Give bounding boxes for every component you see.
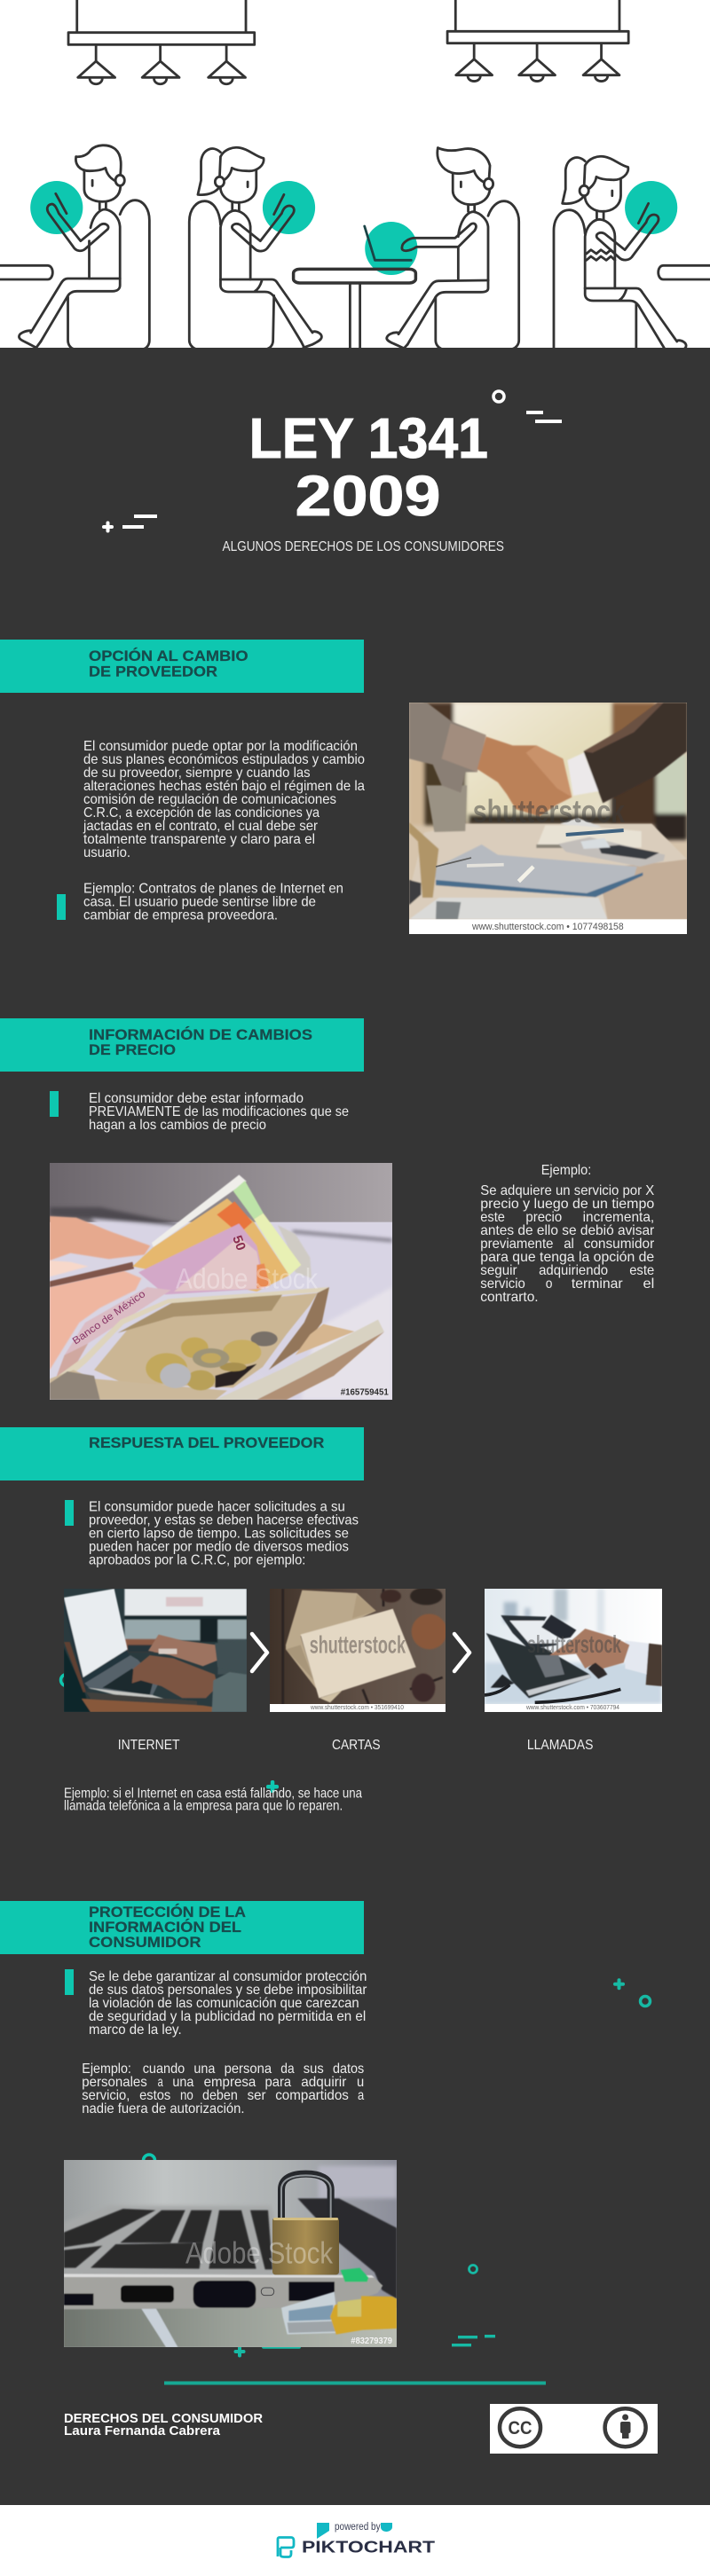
credit text: Laura Fernanda Cabrera (64, 2424, 221, 2439)
heading bar: CONSUMIDOR (89, 1935, 201, 1951)
example text: cuando (143, 2062, 185, 2077)
body text (89, 1499, 359, 1567)
header illustration: people in a cafe (0, 0, 710, 348)
photo: handshake (409, 703, 687, 934)
photo: padlock on laptop (64, 2160, 397, 2347)
example text: ser (248, 2088, 266, 2103)
example text (64, 1787, 362, 1814)
heading bar: RESPUESTA DEL PROVEEDOR (89, 1435, 324, 1451)
section 4: proteccion de la informacion del consumidor (0, 1901, 397, 2358)
body text: hagan a los cambios de precio (89, 1118, 266, 1133)
example text: servicio, (82, 2088, 130, 2103)
body text: jactadas en el contrato, el cual debe ser (83, 819, 319, 834)
body text: El consumidor puede optar por la modificación (83, 739, 358, 754)
stock caption: www.shutterstock.com • 351699410 (310, 1703, 404, 1711)
arrow 1 (252, 1634, 267, 1671)
example text: terminar (572, 1276, 623, 1292)
teal decorative marks right (452, 1978, 650, 2346)
heading bar: INFORMACIÓN DE CAMBIOS (89, 1026, 312, 1043)
logo flag (317, 2523, 329, 2539)
body text: usuario. (83, 845, 130, 860)
example text: u (357, 2075, 364, 2090)
example text: servicio (480, 1276, 525, 1292)
section 1: opcion al cambio de proveedor (0, 640, 687, 934)
example text: para (264, 2075, 291, 2090)
cafe table with laptop (294, 226, 415, 349)
heading bar: PROTECCIÓN DE LA (89, 1904, 246, 1920)
heading bar: DE PROVEEDOR (89, 664, 217, 679)
body text: C.R.C, a excepción de las condiciones ya (83, 805, 320, 821)
body text: proveedor, y estas se deben hacerse efectivas (89, 1512, 359, 1528)
body text: alteraciones hechas estén bajo el régimen de la (83, 779, 365, 794)
example text: este (629, 1263, 654, 1278)
teal ring behind first photo (60, 1675, 73, 1685)
example text: empresa (204, 2075, 256, 2090)
photo labels: CARTAS (332, 1738, 381, 1753)
photo: envelope and card (270, 1587, 447, 1712)
example text: personales (82, 2075, 147, 2090)
body text (83, 739, 365, 860)
arrow 2 (454, 1634, 469, 1671)
example text: adquiriendo (539, 1263, 608, 1278)
teal dash and plus under lock photo (234, 2344, 301, 2358)
example text: Ejemplo: Contratos de planes de Internet en (83, 882, 343, 897)
stock id: #83279379 (351, 2336, 392, 2346)
section 2: informacion de cambios de precio (0, 1018, 655, 1400)
example text: antes de ello se debió avisar (480, 1223, 655, 1238)
credit text: DERECHOS DEL CONSUMIDOR (64, 2412, 264, 2426)
body text (89, 1091, 349, 1133)
creative commons licence badge (490, 2404, 658, 2454)
bill denomination: 50 (229, 1234, 248, 1253)
example text: llamada telefónica a la empresa para que lo reparen. (64, 1799, 343, 1814)
example text: al (564, 1237, 574, 1252)
body text: en cierto lapso de tiempo. Las solicitudes se (89, 1526, 349, 1541)
marker (65, 1969, 74, 1995)
photo labels: LLAMADAS (527, 1738, 593, 1753)
example text: estos (139, 2088, 170, 2103)
ceiling lamp left (68, 0, 255, 84)
example text: contrarto. (480, 1290, 539, 1305)
bank name on note: Banco de México (71, 1289, 147, 1347)
heading bar: INFORMACIÓN DEL (89, 1919, 241, 1936)
example text: el (643, 1276, 654, 1292)
example text (83, 882, 343, 923)
watermark: Adobe Stock (185, 2237, 334, 2271)
photo labels (118, 1738, 593, 1753)
body text: PREVIAMENTE de las modificaciones que se (89, 1104, 349, 1119)
footer band (0, 2505, 710, 2576)
title block (222, 406, 504, 554)
body text: comisión de regulación de comunicaciones (83, 792, 336, 807)
heading bar: DE PRECIO (89, 1042, 176, 1058)
example text: nadie fuera de autorización. (82, 2101, 245, 2117)
person 4 with phone (554, 156, 686, 357)
heading bar: OPCIÓN AL CAMBIO (89, 648, 248, 664)
photo: telephone (485, 1589, 662, 1712)
wordmark: PIKTOCHART (302, 2538, 436, 2556)
stock caption: www.shutterstock.com • 703607794 (525, 1703, 619, 1711)
title: 2009 (296, 464, 440, 528)
example text: adquirir (301, 2075, 347, 2090)
example text: para que tenga la opción de (480, 1250, 654, 1265)
example text: una (193, 2062, 215, 2077)
example text: incrementa, (583, 1210, 654, 1225)
person 3 with laptop (387, 148, 519, 349)
stock caption: www.shutterstock.com • 1077498158 (471, 922, 624, 932)
marker (50, 1091, 59, 1117)
example text: datos (333, 2062, 364, 2077)
example text: este (480, 1210, 505, 1225)
body text: de sus datos personales y se debe imposibilitar (89, 1983, 367, 1998)
heading bar (0, 640, 364, 693)
watermark: Adobe Stock (176, 1263, 319, 1295)
example text: Ejemplo: (541, 1163, 591, 1178)
logo shield (381, 2523, 392, 2532)
example text: a (158, 2075, 163, 2090)
marker (65, 1500, 74, 1526)
watermark: shutterstock (527, 1630, 621, 1658)
watermark: shutterstock (473, 793, 626, 829)
icon: attribution person (605, 2408, 646, 2446)
side tables (0, 265, 710, 279)
example text: consumidor (584, 1237, 655, 1252)
subtitle: ALGUNOS DERECHOS DE LOS CONSUMIDORES (222, 539, 504, 554)
body text (89, 1969, 367, 2038)
example text: Ejemplo: (82, 2062, 131, 2077)
body text: la violación de las comunicación que carezcan (89, 1996, 359, 2011)
body text: de sus planes económicos estipulados y cambio (83, 752, 365, 767)
teal plus mark (266, 1780, 279, 1793)
white decorative marks (102, 391, 562, 532)
teal divider line (164, 2381, 546, 2384)
example text: seguir (480, 1263, 517, 1278)
example text: persona (225, 2062, 272, 2077)
title: LEY 1341 (249, 406, 488, 470)
example text (480, 1163, 655, 1305)
example text: a (358, 2088, 364, 2103)
body text: pueden hacer por medio de diversos medios (89, 1539, 349, 1554)
body text: Se le debe garantizar al consumidor protección (89, 1969, 367, 1984)
example text: Se adquiere un servicio por X (480, 1183, 654, 1198)
person 1 with phone (19, 145, 149, 349)
heading bar (0, 1901, 364, 1954)
body text: totalmente transparente y claro para el (83, 832, 315, 847)
logo mark (278, 2537, 294, 2556)
photo: wallet with money (50, 1163, 392, 1400)
example text (82, 2062, 364, 2117)
body text: aprobados por la C.R.C, por ejemplo: (89, 1552, 305, 1567)
heading bar (0, 1427, 364, 1480)
stock id: #165759451 (341, 1388, 389, 1398)
example text: cambiar de empresa proveedora. (83, 908, 278, 923)
powered by: powered by (335, 2522, 381, 2533)
example text: casa. El usuario puede sentirse libre de (83, 895, 316, 910)
heading bar (0, 1018, 364, 1072)
example text: da (280, 2062, 295, 2077)
example text: precio y luego de un tiempo (480, 1197, 654, 1212)
icon: cc (500, 2408, 540, 2446)
body text: El consumidor puede hacer solicitudes a su (89, 1499, 345, 1514)
example text: o (546, 1276, 553, 1292)
example text: previamente (480, 1237, 553, 1252)
person 2 with phone (189, 147, 321, 349)
credit text (64, 2412, 264, 2439)
body text: marco de la ley. (89, 2022, 182, 2038)
photo: hands on laptop (64, 1589, 247, 1712)
example text: no (180, 2088, 193, 2103)
example text: sus (304, 2062, 324, 2077)
example marker (57, 894, 66, 920)
section 3: respuesta del proveedor (0, 1427, 662, 1814)
example text: una (172, 2075, 193, 2090)
photo labels: INTERNET (118, 1738, 180, 1753)
body text: de seguridad y la publicidad no permitida en el (89, 2009, 366, 2024)
ceiling lamp right (447, 0, 628, 82)
watermark: shutterstock (310, 1631, 406, 1659)
teal ring behind lock photo (144, 2155, 154, 2166)
example text: precio (525, 1210, 562, 1225)
piktochart logo (278, 2522, 436, 2556)
example text: compartidos (275, 2088, 349, 2103)
body text: El consumidor debe estar informado (89, 1091, 304, 1106)
title (249, 406, 488, 528)
example text: deben (202, 2088, 238, 2103)
icon: cc: CC (508, 2418, 532, 2439)
example text: Ejemplo: si el Internet en casa está fallando, se hace una (64, 1787, 362, 1802)
body text: de su proveedor, siempre y cuando las (83, 766, 311, 781)
